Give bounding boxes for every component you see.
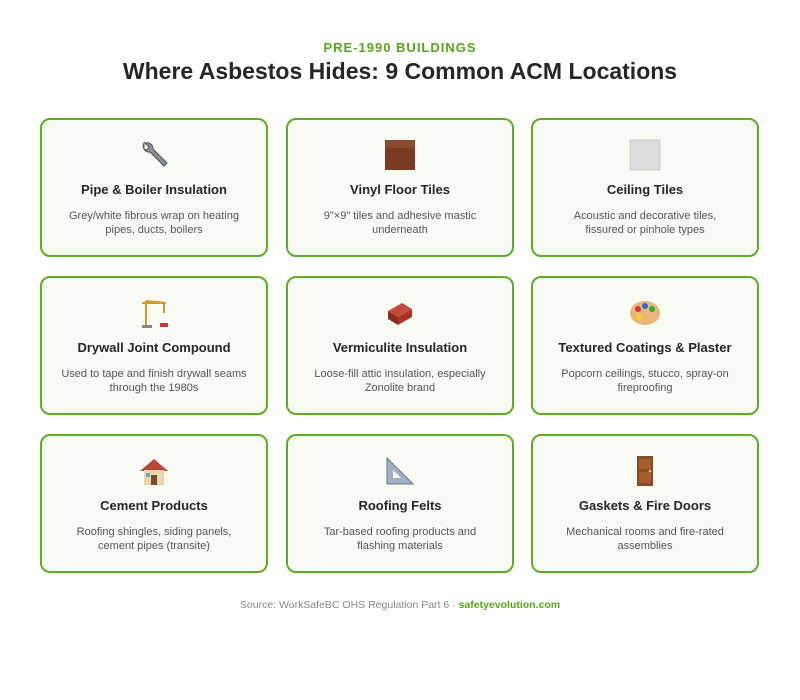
subtitle: PRE-1990 BUILDINGS (323, 40, 477, 55)
card: ceiling tiles: Acoustic and decorative tiles, fissured or pinhole types (574, 210, 716, 236)
card: roofing felts: Tar-based roofing products and flashing materials (324, 526, 476, 552)
card: cement products: Cement Products (100, 498, 208, 513)
card: vinyl floor tiles (286, 118, 514, 257)
card: ceiling tiles (531, 118, 759, 257)
card: textured coatings: Popcorn ceilings, stucco, spray-on fireproofing (561, 368, 729, 394)
card: vermiculite (286, 276, 514, 415)
card: textured coatings: Textured Coatings & Plaster (558, 340, 732, 355)
card: drywall: Used to tape and finish drywall seams through the 1980s (61, 368, 247, 394)
card: cement products (40, 434, 268, 573)
card: drywall (40, 276, 268, 415)
card: pipe & boiler: Pipe & Boiler Insulation (81, 182, 227, 197)
icon: house (140, 459, 168, 485)
card: vermiculite: Vermiculite Insulation (333, 340, 467, 355)
icon: set square (386, 456, 414, 484)
icon: white tile (630, 140, 660, 170)
card: textured coatings (531, 276, 759, 415)
icon: brown tile (385, 140, 415, 170)
icon: door (637, 456, 653, 486)
card: roofing felts (286, 434, 514, 573)
card: pipe & boiler (40, 118, 268, 257)
card: vinyl floor tiles: 9"×9" tiles and adhesive mastic underneath (324, 210, 476, 236)
card: ceiling tiles: Ceiling Tiles (607, 182, 683, 197)
icon: wrench (142, 141, 168, 167)
card: vermiculite: Loose-fill attic insulation, especially Zonolite brand (314, 368, 486, 394)
card: vinyl floor tiles: Vinyl Floor Tiles (350, 182, 450, 197)
card: cement products: Roofing shingles, siding panels, cement pipes (transite) (77, 526, 231, 552)
icon: bricks (388, 303, 412, 325)
source footer: Source: WorkSafeBC OHS Regulation Part 6 · safetyevolution.com (240, 599, 560, 611)
icon: crane (142, 300, 168, 328)
icon: palette (630, 301, 660, 325)
card: roofing felts: Roofing Felts (358, 498, 442, 513)
card: pipe & boiler: Grey/white fibrous wrap on heating pipes, ducts, boilers (69, 210, 239, 236)
card: gaskets: Gaskets & Fire Doors (579, 498, 711, 513)
card: gaskets (531, 434, 759, 573)
title: Where Asbestos Hides: 9 Common ACM Locations (123, 58, 677, 84)
card: drywall: Drywall Joint Compound (77, 340, 231, 355)
card: gaskets: Mechanical rooms and fire-rated assemblies (566, 526, 724, 552)
